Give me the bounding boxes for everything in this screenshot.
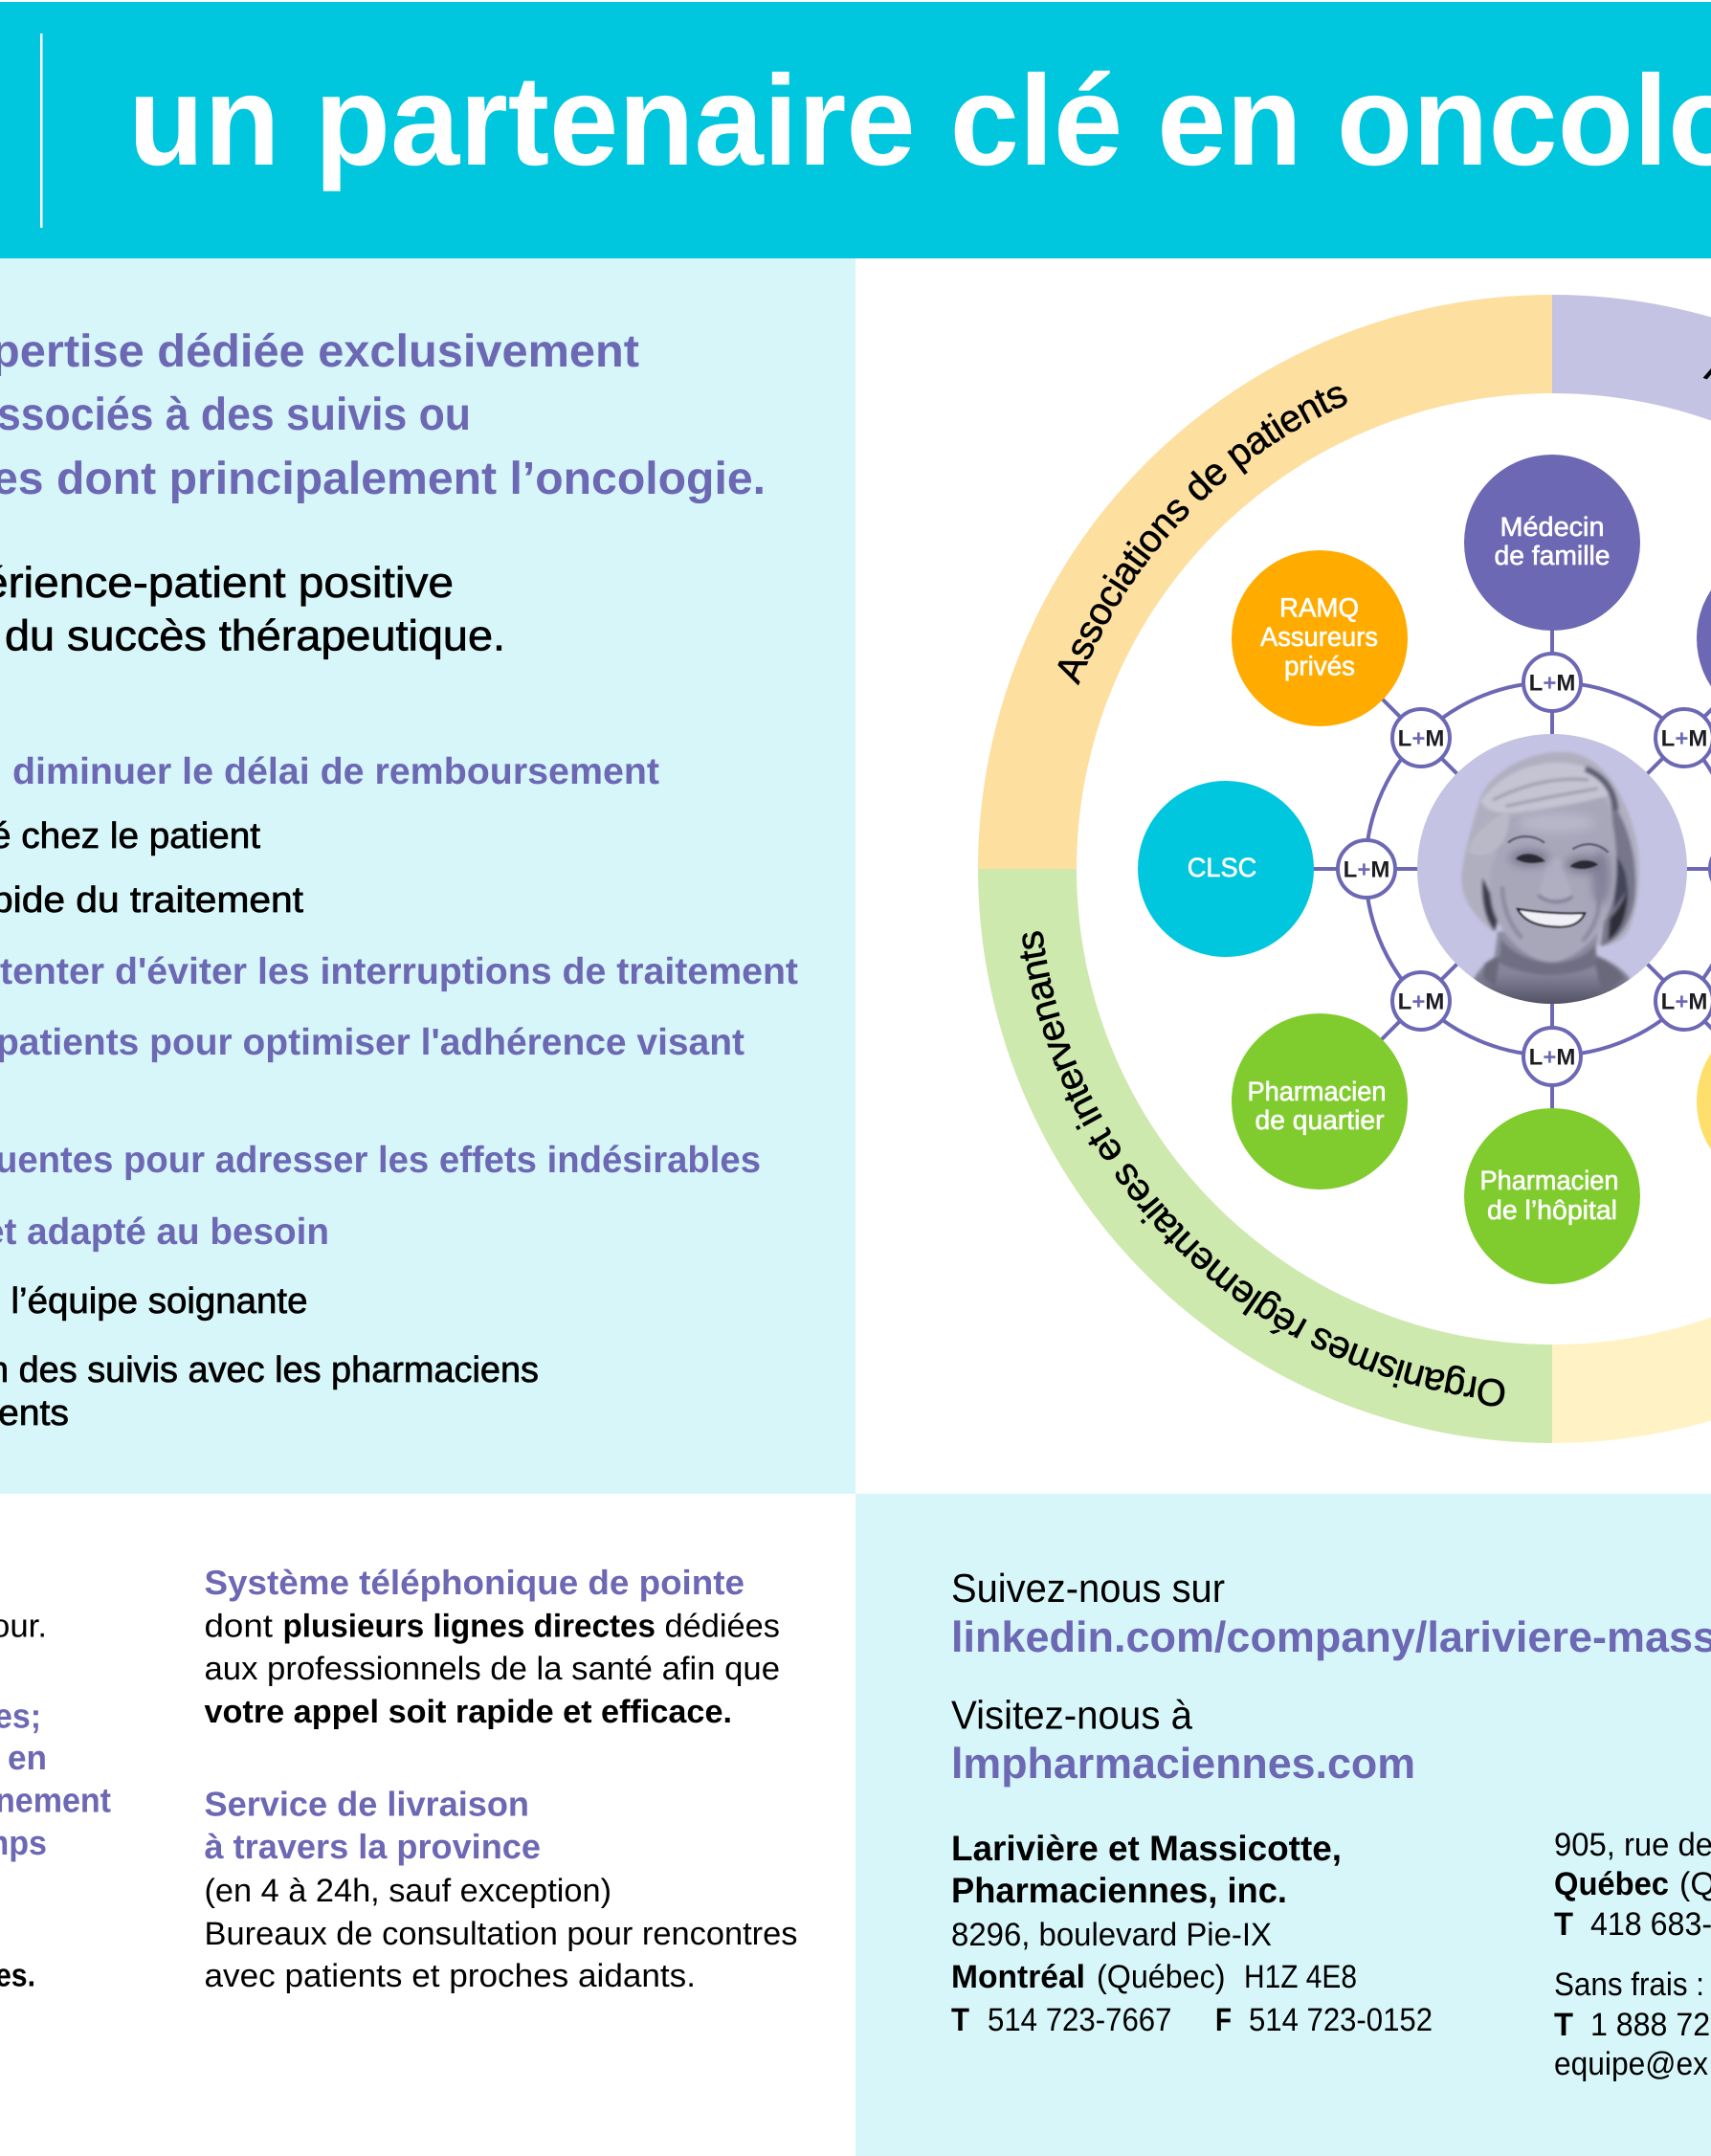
Montréal address: H1Z 4E8 (1244, 1959, 1357, 1995)
list of services: tenter d'éviter les interruptions de traitement (0, 951, 798, 992)
Montréal address: (Québec) (1097, 1959, 1225, 1995)
phone system block: aux professionnels de la santé afin que (205, 1651, 780, 1687)
Québec address: T (1554, 1906, 1573, 1943)
Montréal address: 514 723-0152 (1249, 2002, 1433, 2038)
panel: contact (856, 1494, 1711, 2156)
delivery block: Bureaux de consultation pour rencontres (205, 1916, 798, 1952)
circle: pharmacien de quartier: de quartier (1255, 1105, 1384, 1135)
L+M nodes: L+M (1398, 725, 1444, 752)
delivery block: (en 4 à 24h, sauf exception) (205, 1873, 611, 1909)
Montréal address (951, 1829, 1433, 2038)
list of services: pide du traitement (0, 880, 303, 921)
list of services: uentes pour adresser les effets indésirables (0, 1140, 761, 1181)
phone system block: dédiées (664, 1608, 780, 1644)
linkedin link: Suivez-nous sur (951, 1566, 1225, 1611)
list of services: n des suivis avec les pharmaciens (0, 1350, 539, 1390)
ring segment: associations de patients: Associations de patients (1057, 387, 1347, 685)
list of services: ents (0, 1393, 69, 1434)
L+M nodes: L+M (1529, 1045, 1575, 1070)
phone system block: Système téléphonique de pointe (205, 1563, 744, 1602)
lead statement (0, 326, 766, 504)
panel: services (0, 1563, 798, 1994)
circle: pharmacien de quartier (1232, 1013, 1408, 1189)
circle: top right purple (1697, 550, 1711, 726)
Montréal address: F (1215, 2002, 1232, 2038)
circle: médecin de famille (1464, 455, 1640, 631)
Montréal address: Pharmaciennes, inc. (951, 1871, 1287, 1910)
patient experience statement (0, 558, 505, 660)
Québec address (1554, 1827, 1711, 2082)
website link: Visitez-nous à (951, 1692, 1193, 1738)
circle: médecin de famille: Médecin (1500, 512, 1604, 542)
L+M nodes: L+M (1661, 989, 1707, 1014)
left column fragments: en (8, 1738, 47, 1777)
phone system block: dont (205, 1608, 274, 1644)
L+M nodes: L+M (1398, 989, 1444, 1014)
circle: pharmacien de l'hôpital: de l’hôpital (1487, 1195, 1617, 1225)
Montréal address: Larivière et Massicotte, (951, 1829, 1342, 1868)
circle: pharmacien de l'hôpital (1464, 1108, 1640, 1284)
ring segment: bottom right (1552, 869, 1711, 1443)
ring segment: associations de patients (978, 295, 1552, 869)
delivery block: avec patients et proches aidants. (205, 1958, 696, 1994)
circle: RAMQ assureurs privés: RAMQ (1279, 593, 1359, 622)
list of services: diminuer le délai de remboursement (12, 751, 659, 792)
circle: médecin de famille: de famille (1495, 541, 1610, 570)
delivery block (205, 1784, 798, 1994)
phone system block: plusieurs lignes directes (283, 1608, 656, 1644)
list of services (0, 751, 798, 1434)
delivery block: à travers la province (205, 1827, 541, 1866)
Montréal address: Montréal (951, 1959, 1085, 1995)
circle: pharmacien de quartier: Pharmacien (1248, 1077, 1386, 1106)
ring segment: top right (1552, 295, 1711, 421)
header band (0, 2, 1711, 258)
Montréal address: T (951, 2002, 969, 2038)
phone system block (205, 1563, 780, 1730)
photo: smiling patient (1417, 734, 1687, 1008)
lead statement: es dont principalement l’oncologie. (0, 454, 766, 504)
lead statement: pertise dédiée exclusivement (0, 326, 639, 377)
L+M nodes (1338, 654, 1711, 1085)
Montréal address: 514 723-7667 (988, 2002, 1171, 2038)
panel: expertise (0, 258, 856, 1494)
circle: CLSC: CLSC (1188, 853, 1256, 882)
diagram: patient care network (978, 295, 1711, 1443)
website link (951, 1692, 1415, 1788)
circle: RAMQ assureurs privés: Assureurs (1260, 622, 1378, 652)
delivery block: Service de livraison (205, 1784, 529, 1824)
website link: lmpharmaciennes.com (951, 1739, 1415, 1788)
network lines (1257, 574, 1711, 1164)
circle: RAMQ assureurs privés (1232, 550, 1408, 726)
ring segment: organismes réglementaires: Organismes réglementaires et intervenants (1020, 931, 1504, 1407)
linkedin link: linkedin.com/company/lariviere-mass (951, 1612, 1711, 1661)
circle: pharmacien de l'hôpital: Pharmacien (1479, 1166, 1619, 1195)
circle: CLSC (1138, 781, 1314, 957)
Montréal address: 8296, boulevard Pie-IX (951, 1917, 1272, 1953)
L+M nodes: L+M (1529, 670, 1575, 697)
left column fragments (0, 1608, 111, 1994)
Québec address: T (1554, 2007, 1573, 2043)
linkedin link (951, 1566, 1711, 1661)
phone system block: votre appel soit rapide et efficace. (205, 1694, 732, 1730)
L+M nodes: L+M (1661, 725, 1707, 752)
list of services: patients pour optimiser l'adhérence visant (0, 1022, 744, 1063)
circle: bottom right yellow (1697, 1013, 1711, 1189)
lead statement: ssociés à des suivis ou (0, 389, 471, 440)
patient experience statement: du succès thérapeutique. (5, 611, 505, 660)
Québec address: Québec (1554, 1866, 1669, 1902)
list of services: l’équipe soignante (11, 1281, 308, 1322)
circle: RAMQ assureurs privés: privés (1284, 651, 1355, 681)
L+M nodes: L+M (1344, 857, 1389, 882)
